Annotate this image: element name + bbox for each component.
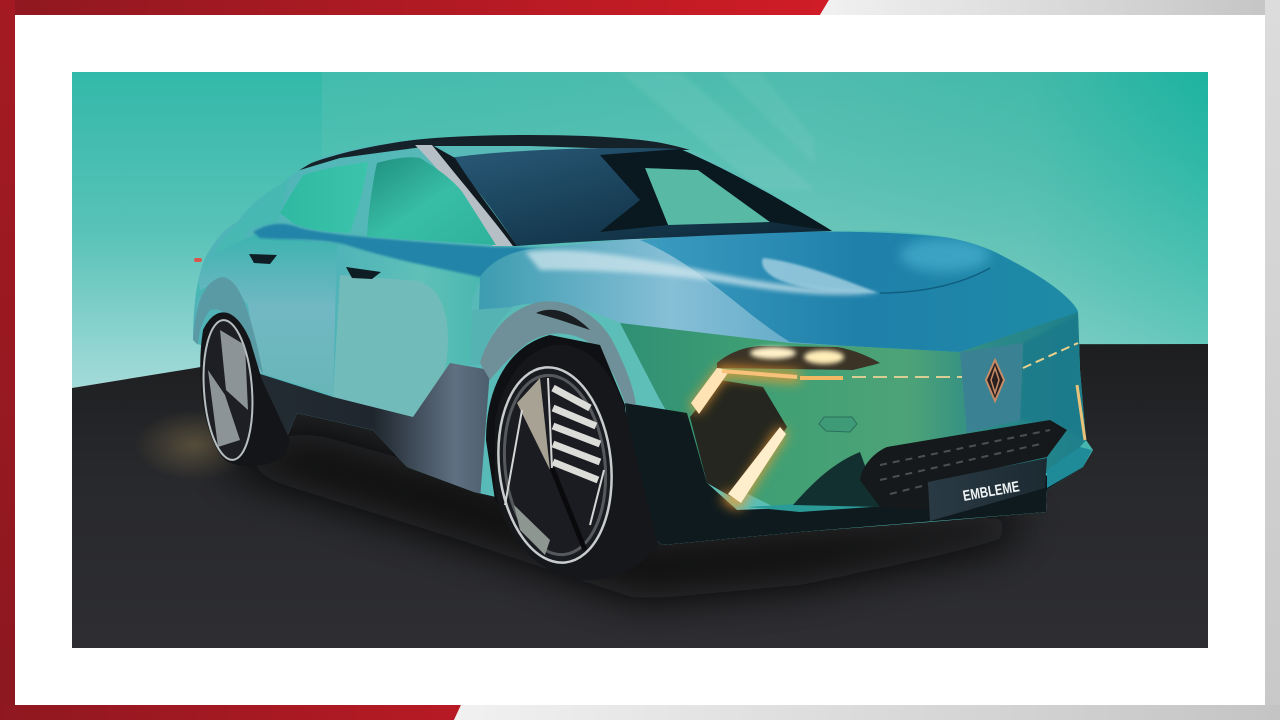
hood light patch [762, 258, 878, 293]
fender lower teal [478, 308, 511, 344]
front bumper dark [625, 403, 1083, 545]
door handle rear [249, 254, 277, 264]
nose panel [620, 312, 1086, 510]
front side window [367, 157, 496, 245]
waist band [252, 222, 550, 278]
rear wheel arch [193, 277, 263, 373]
front wheel [489, 345, 658, 580]
photo: Renault Embleme concept car [72, 72, 1208, 648]
front rim spokes [505, 378, 604, 525]
door scoop [333, 275, 448, 417]
sensor panel [819, 417, 857, 432]
back wall [322, 72, 1208, 352]
centre badge panel [960, 343, 1023, 433]
roof [299, 135, 690, 170]
frame: bottom grey bar [454, 705, 1280, 720]
windscreen [450, 148, 832, 246]
rear side window [280, 162, 368, 233]
front rim stripes [553, 388, 600, 480]
rear tyre [200, 312, 290, 466]
upper rear quarter [193, 175, 290, 300]
hood centre crease [880, 268, 990, 293]
headlight lamps [750, 347, 844, 364]
nose shading right [1021, 317, 1079, 422]
frame: top grey bar [820, 0, 1280, 15]
front rim light wedge [517, 378, 550, 470]
dash dark [600, 149, 832, 232]
Renault diamond badge [986, 360, 1004, 401]
front tyre [495, 345, 658, 580]
front wheel well [486, 335, 630, 560]
hood bright dome [900, 238, 990, 272]
front rim inner ring [496, 370, 614, 560]
hood highlight [525, 250, 880, 295]
frame: right grey bar [1265, 0, 1280, 720]
front lamp cavity [690, 380, 787, 500]
teal lip [748, 504, 876, 512]
front rim lower wedge [514, 505, 550, 555]
car body silhouette [193, 135, 1093, 545]
number plate EMBLEME: EMBLEME [962, 478, 1021, 505]
front rim dark spoke [552, 468, 585, 550]
lower sill [257, 363, 490, 500]
A pillar dark edge [432, 145, 517, 246]
frame: bottom red bar [0, 705, 461, 720]
floor light glow [145, 416, 231, 474]
rear rim [199, 318, 257, 462]
lower nose dark cut [793, 452, 880, 507]
arch chrome highlight [536, 310, 590, 330]
door handle front [346, 267, 381, 279]
rear rim panels [208, 330, 248, 447]
rear wheel [193, 277, 290, 466]
front fender [478, 238, 960, 352]
number plate EMBLEME [928, 458, 1047, 521]
front rim [489, 362, 621, 568]
floor [72, 344, 1208, 648]
front door panel [333, 245, 480, 393]
left wall [72, 72, 322, 388]
hood [640, 232, 1078, 352]
front wheel arch [480, 301, 636, 405]
frame: left red bar [0, 0, 15, 720]
daytime light glow [694, 372, 800, 503]
rear door panel [197, 235, 345, 397]
frame: top red bar [0, 0, 829, 15]
car [193, 133, 1093, 580]
headlight housing [717, 346, 880, 370]
rear tail light [194, 258, 202, 262]
car shadow [215, 430, 1030, 600]
daytime running lights [691, 343, 1085, 503]
right bumper tip [1047, 447, 1092, 488]
grille [860, 420, 1067, 510]
A pillar [415, 145, 513, 246]
windscreen inner reflection [645, 168, 770, 225]
